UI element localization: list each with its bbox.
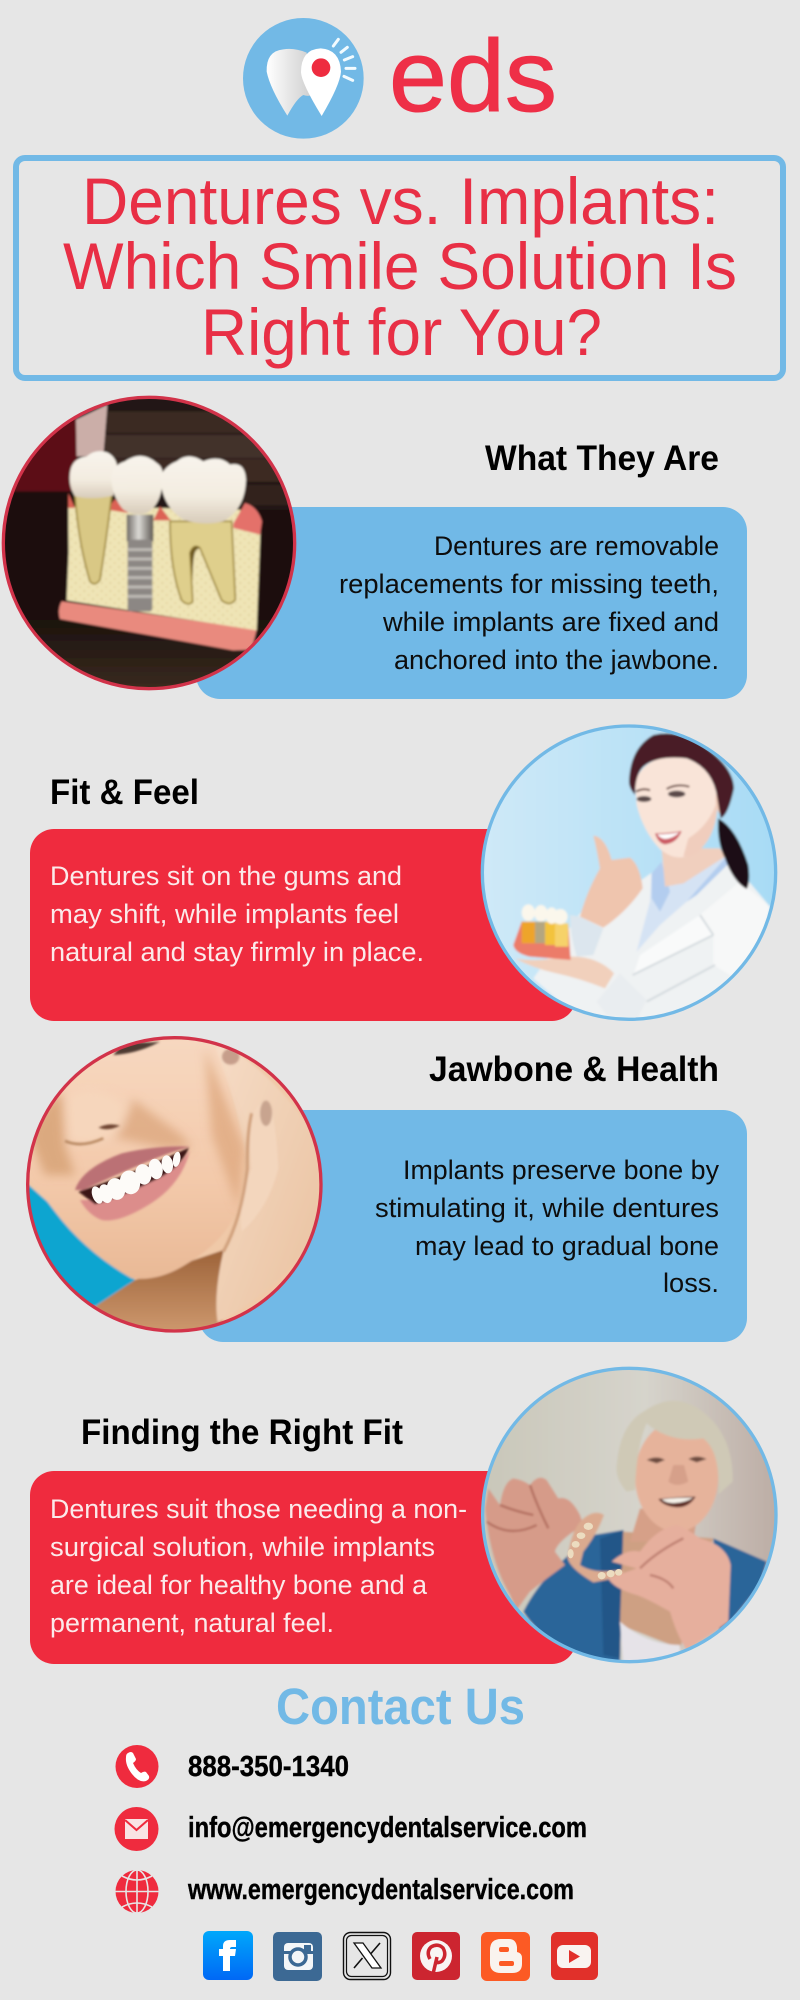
card background	[30, 1471, 576, 1664]
heading: Fit & Feel	[50, 773, 199, 812]
body text: are ideal for healthy bone and a	[50, 1570, 428, 1600]
panel: fit and feel	[30, 725, 780, 1025]
icon: phone	[116, 1745, 158, 1788]
body text	[50, 861, 424, 967]
icon: blogger	[481, 1932, 530, 1981]
logo wordmark: eds	[389, 19, 557, 133]
heading: What They Are	[485, 439, 719, 478]
body text	[339, 531, 719, 675]
panel: jawbone and health	[25, 1035, 747, 1342]
body text: surgical solution, while implants	[50, 1532, 435, 1562]
body text: anchored into the jawbone.	[394, 645, 719, 675]
photo: dentist holding tooth model	[480, 725, 780, 1025]
photo: senior woman holding denture	[480, 1365, 780, 1665]
icon: pinterest	[412, 1932, 460, 1980]
body text: Implants preserve bone by	[403, 1155, 719, 1185]
body text: Dentures suit those needing a non-	[50, 1494, 467, 1524]
contact heading: Contact Us	[276, 1678, 525, 1735]
photo: smiling woman	[25, 1035, 325, 1335]
heading: Finding the Right Fit	[81, 1413, 403, 1452]
body text: natural and stay firmly in place.	[50, 937, 424, 967]
phone number: 888-350-1340	[188, 1751, 349, 1783]
body text	[375, 1155, 719, 1298]
body text	[50, 1494, 467, 1638]
card background	[30, 829, 576, 1021]
title	[63, 164, 737, 369]
icon: instagram	[273, 1932, 322, 1981]
body text: stimulating it, while dentures	[375, 1193, 719, 1223]
icon: youtube	[551, 1932, 598, 1980]
body text: while implants are fixed and	[382, 607, 719, 637]
social icons	[203, 1931, 598, 1981]
facial shading	[28, 1048, 245, 1208]
body text: loss.	[663, 1268, 719, 1298]
body text: replacements for missing teeth,	[339, 569, 719, 599]
card background	[199, 1110, 747, 1342]
title box	[16, 158, 783, 378]
icon: globe	[116, 1870, 158, 1913]
email address: info@emergencydentalservice.com	[188, 1812, 587, 1844]
heading: Jawbone & Health	[429, 1050, 719, 1089]
website address: www.emergencydentalservice.com	[187, 1874, 574, 1906]
icon: tooth with location pin	[243, 18, 364, 139]
icon: email	[114, 1807, 158, 1851]
panel: what they are	[0, 393, 747, 699]
body text: may lead to gradual bone	[415, 1231, 719, 1261]
body text: permanent, natural feel.	[50, 1608, 334, 1638]
panel: finding the right fit	[30, 1365, 780, 1665]
logo	[243, 18, 557, 139]
body text: Dentures are removable	[434, 531, 719, 561]
title: Right for You?	[201, 295, 602, 369]
body text: Dentures sit on the gums and	[50, 861, 402, 891]
icon: facebook	[203, 1931, 253, 1980]
title: Which Smile Solution Is	[63, 229, 737, 303]
body text: may shift, while implants feel	[50, 899, 399, 929]
icon: X	[344, 1932, 390, 1980]
card background	[196, 507, 747, 699]
title: Dentures vs. Implants:	[82, 164, 719, 238]
panel: contact	[114, 1678, 598, 1981]
photo: implant tooth model	[0, 393, 300, 693]
